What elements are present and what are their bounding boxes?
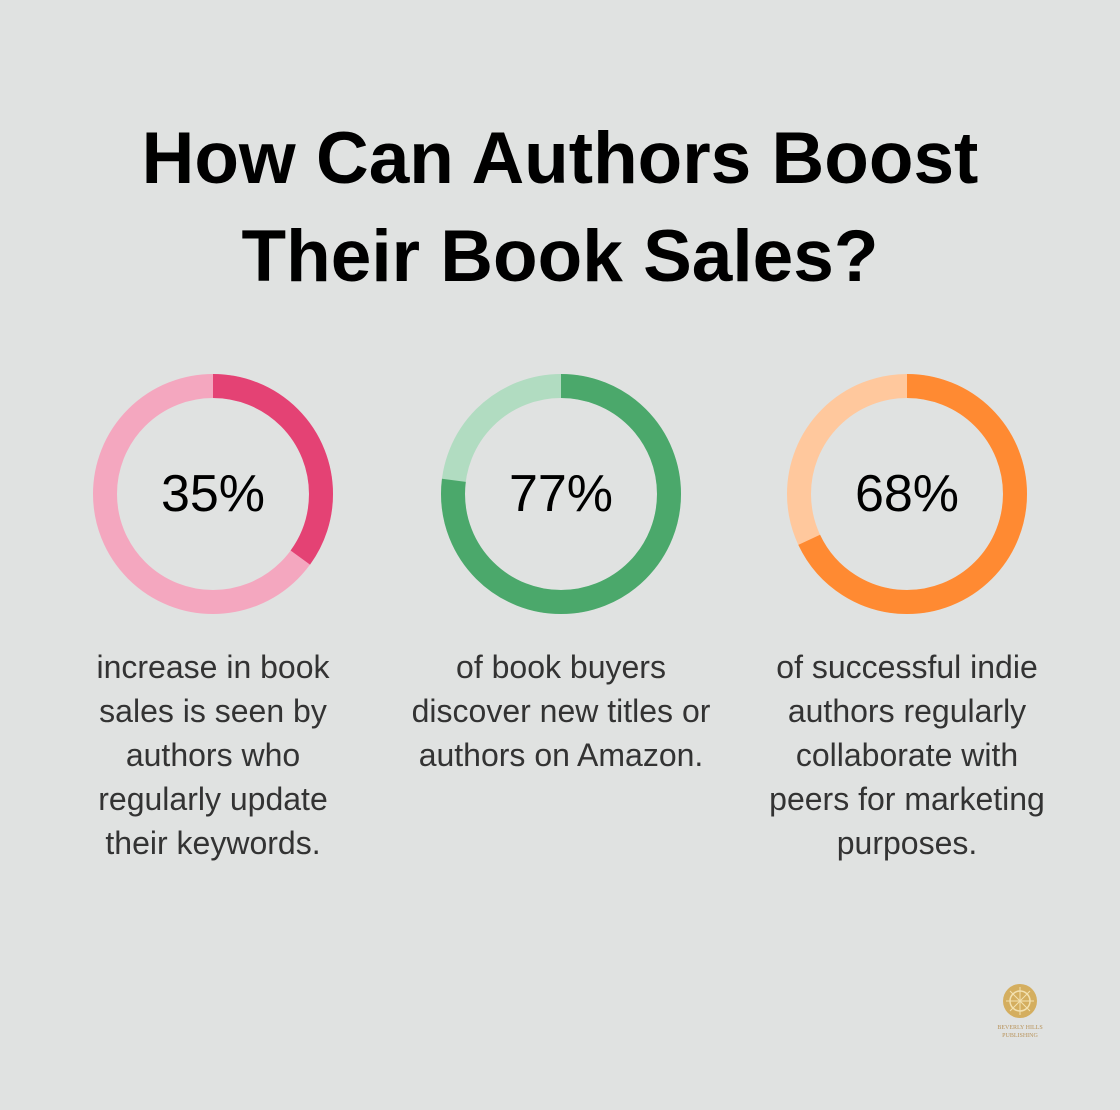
donut: 68%: 68%	[855, 465, 959, 523]
caption: 68%: purposes.	[837, 825, 977, 861]
logo	[997, 984, 1043, 1039]
title	[142, 118, 978, 297]
donut: 35%	[93, 374, 333, 614]
logo: BEVERLY HILLS	[997, 1025, 1043, 1031]
caption: 35%: authors who	[126, 737, 300, 773]
caption: 35%	[96, 649, 330, 861]
title: How Can Authors Boost	[142, 118, 978, 199]
caption: 35%: sales is seen by	[99, 693, 327, 729]
caption: 77%	[412, 649, 710, 773]
donut: 77%: 77%	[509, 465, 613, 523]
caption: 68%: collaborate with	[796, 737, 1018, 773]
caption: 35%: increase in book	[96, 649, 330, 685]
title: Their Book Sales?	[242, 216, 878, 297]
logo: PUBLISHING	[1002, 1033, 1038, 1039]
caption: 77%: discover new titles or	[412, 693, 710, 729]
caption: 68%: peers for marketing	[769, 781, 1045, 817]
caption: 68%	[769, 649, 1045, 861]
caption: 35%: their keywords.	[105, 825, 321, 861]
caption: 77%: of book buyers	[456, 649, 666, 685]
donut: 35%: 35%	[161, 465, 265, 523]
donut: 77%	[441, 374, 681, 614]
caption: 68%: authors regularly	[788, 693, 1026, 729]
caption: 77%: authors on Amazon.	[419, 737, 703, 773]
caption: 68%: of successful indie	[776, 649, 1038, 685]
donut: 68%	[787, 374, 1027, 614]
caption: 35%: regularly update	[98, 781, 328, 817]
